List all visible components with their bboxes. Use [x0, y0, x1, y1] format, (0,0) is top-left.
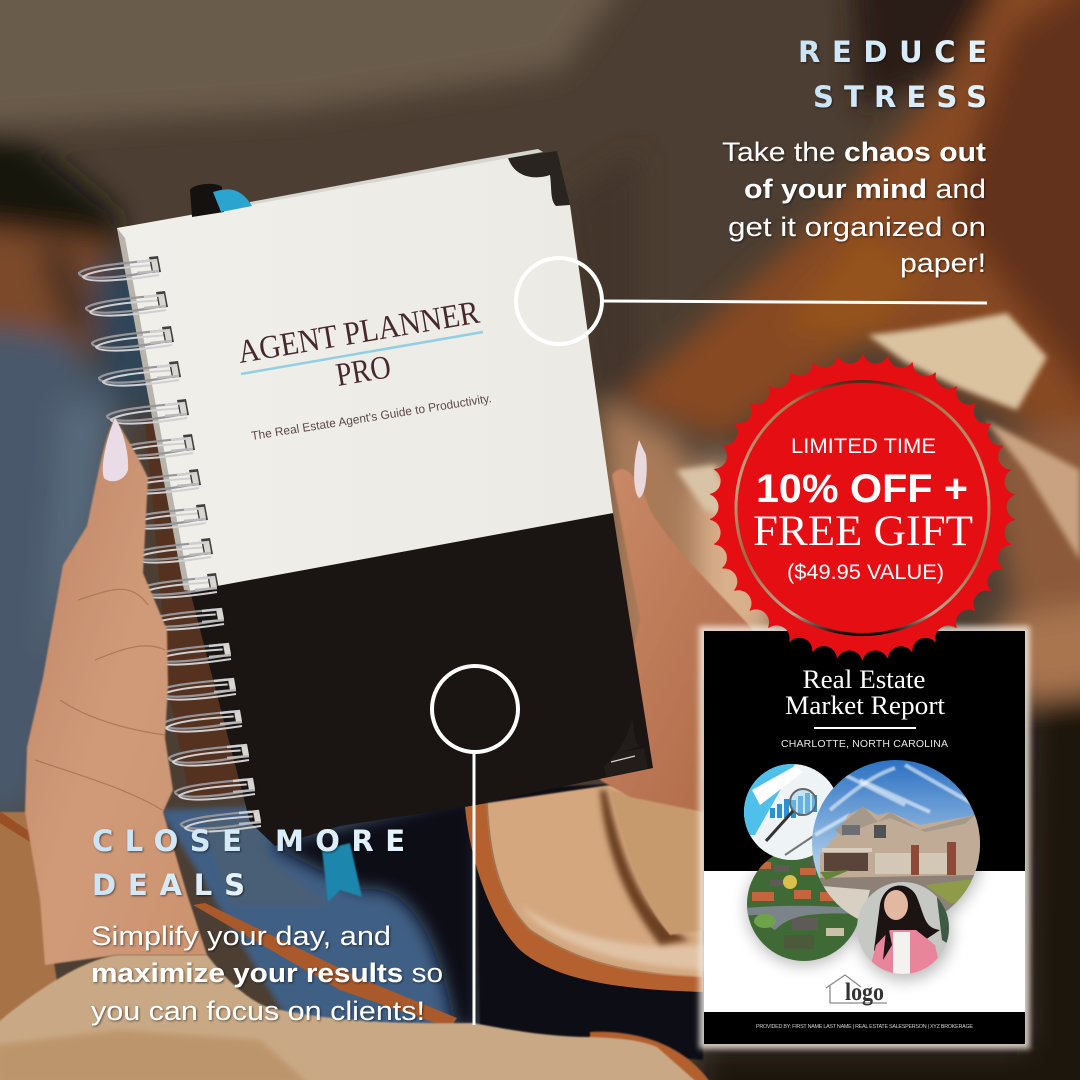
badge text — [753, 435, 973, 584]
corner guard top right — [508, 151, 570, 206]
heading: close more deals: DEALS — [92, 868, 245, 902]
report location: CHARLOTTE, NORTH CAROLINA — [781, 738, 948, 750]
text block: close more deals: you can focus on clients! — [91, 996, 425, 1026]
photo: agent portrait — [855, 881, 951, 977]
photo shadows — [747, 764, 982, 980]
ribbon bookmark top — [190, 184, 252, 217]
ribbon bookmark bottom — [322, 843, 362, 902]
heading: reduce stress: STRESS — [813, 80, 987, 114]
badge text: 10% OFF + — [756, 467, 968, 511]
offer seal badge — [710, 354, 1016, 660]
hand creases — [35, 589, 165, 810]
text block: close more deals: maximize your results so — [91, 958, 443, 988]
text block: reduce stress: of your mind and — [744, 174, 986, 204]
text block: reduce stress: get it organized on — [728, 212, 986, 242]
inner spine shade — [117, 228, 190, 591]
corner guard bottom right — [604, 718, 648, 777]
knit panel pieces — [868, 313, 1047, 410]
icon: right thumb nail — [634, 440, 647, 498]
report title — [785, 665, 946, 720]
callout line: bottom — [472, 752, 476, 1025]
logo: logo — [845, 979, 884, 1006]
report title: Market Report — [785, 691, 946, 720]
text block: close more deals: Simplify your day, and — [91, 921, 391, 951]
heading: reduce stress — [798, 35, 987, 114]
text block: close more deals — [91, 921, 443, 1026]
heading: close more deals — [92, 824, 405, 902]
photo: house — [810, 758, 982, 930]
left hand — [25, 418, 207, 965]
market report flyer — [704, 631, 1025, 1044]
planner subtitle: The Real Estate Agent's Guide to Productivity. — [250, 391, 492, 443]
planner white cover — [117, 153, 613, 591]
photo: aerial neighbourhood — [747, 855, 858, 961]
text block: reduce stress: paper! — [900, 248, 986, 278]
callout line: top — [603, 301, 987, 303]
report title: Real Estate — [802, 665, 926, 694]
callout circle: top — [516, 258, 602, 344]
heading: reduce stress: REDUCE — [798, 35, 987, 69]
planner title — [235, 295, 483, 394]
top edge sliver — [250, 149, 543, 205]
report divider — [814, 727, 916, 729]
logo — [826, 975, 887, 1006]
text block: reduce stress: Take the chaos out — [722, 137, 986, 167]
report footer: PROVIDED BY: FIRST NAME LAST NAME | REAL ESTATE SALESPERSON | XYZ BROKERAGE — [756, 1024, 973, 1030]
badge text: LIMITED TIME — [791, 435, 936, 458]
planner black lower cover — [190, 513, 653, 846]
planner title: PRO — [333, 349, 394, 394]
badge text: FREE GIFT — [753, 508, 973, 555]
planner book — [117, 149, 653, 846]
brown fingers behind spiral — [145, 420, 250, 800]
planner title: AGENT PLANNER — [235, 295, 482, 371]
photo: market analysis — [744, 764, 840, 860]
text block: reduce stress — [722, 137, 986, 278]
spiral binding — [79, 256, 263, 832]
callout circle: bottom — [432, 666, 518, 752]
badge text: ($49.95 VALUE) — [787, 561, 944, 584]
badge ring — [736, 382, 989, 634]
heading: close more deals: CLOSE MORE — [92, 824, 405, 858]
market report glow — [699, 626, 1030, 1049]
icon: thumb nail — [103, 418, 128, 481]
right hand — [600, 469, 770, 812]
lap denim and leather — [0, 812, 60, 1030]
